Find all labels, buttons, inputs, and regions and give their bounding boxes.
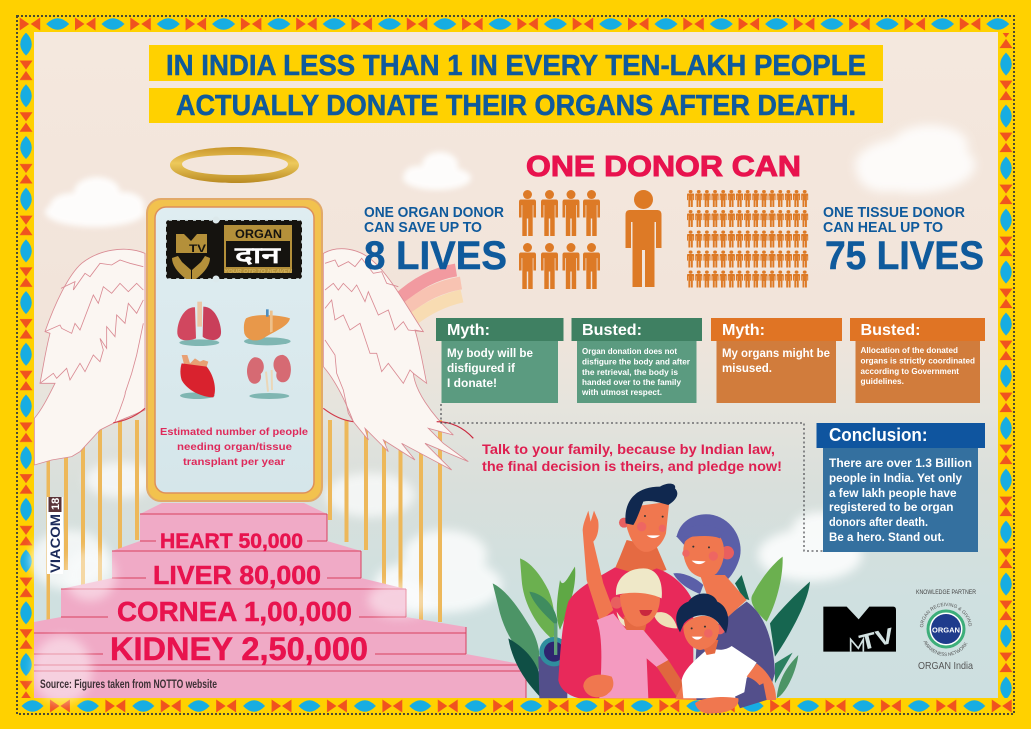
organ demand figures: HEART 50,000	[160, 530, 303, 553]
panel: conclusion: Conclusion:	[829, 425, 928, 445]
tissue donor statement: 75 LIVES	[825, 234, 984, 278]
organ demand figures: CORNEA 1,00,000	[117, 596, 352, 627]
tissue donor statement	[823, 204, 984, 278]
MTV logo: TV	[857, 623, 897, 655]
panel: conclusion: Be a hero. Stand out.	[829, 530, 944, 544]
ticket logo: YOUR OTP TO HEAVEN	[224, 269, 293, 275]
panel: myth one: My body will be	[447, 346, 533, 360]
left angel wing	[34, 249, 145, 465]
panel: busted one: disfigure the body and after	[582, 356, 691, 366]
icon: kidneys	[247, 355, 291, 399]
title banner: ACTUALLY DONATE THEIR ORGANS AFTER DEATH.	[176, 90, 856, 122]
panel: myth one	[436, 318, 564, 403]
organ donor statement: ONE ORGAN DONOR	[364, 204, 504, 221]
panel: conclusion: donors after death.	[829, 515, 928, 529]
panel: myth two: Myth:	[722, 322, 765, 339]
panel: conclusion: people in India. Yet only	[829, 471, 962, 485]
panel: busted two	[850, 318, 985, 403]
panel: busted one: handed over to the family	[582, 377, 681, 387]
panel: conclusion: a few lakh people have	[829, 486, 957, 500]
panel: busted two: guidelines.	[860, 376, 904, 386]
transplant caption: transplant per year	[183, 456, 285, 468]
panel: myth two: My organs might be	[722, 346, 830, 360]
panel: myth one: I donate!	[447, 376, 497, 390]
tissue donor statement: ONE TISSUE DONOR	[823, 204, 965, 221]
family illustration	[493, 484, 810, 714]
organ india logo: ORGAN India	[918, 660, 973, 672]
panel: busted two: Busted:	[860, 322, 920, 339]
phone card	[147, 199, 322, 501]
daughter	[583, 511, 683, 698]
tissue donor statement: CAN HEAL UP TO	[823, 219, 943, 236]
panel: myth two	[711, 318, 842, 403]
clouds	[30, 125, 975, 613]
panel: busted one: Busted:	[582, 322, 642, 339]
panel: conclusion	[816, 423, 985, 552]
organ donor statement: 8 LIVES	[364, 234, 507, 278]
seventy five person pictogram	[687, 190, 808, 288]
transplant caption: needing organ/tissue	[177, 441, 292, 453]
panel: myth one: disfigured if	[447, 361, 516, 375]
icon: liver	[244, 309, 291, 345]
title banner	[149, 45, 883, 123]
large donor figure	[626, 190, 662, 287]
organ donor statement: CAN SAVE UP TO	[364, 219, 482, 236]
son	[675, 594, 776, 714]
ticket logo: दान	[234, 242, 282, 268]
organ india logo: AWARENESS NETWORK	[924, 641, 968, 656]
icon: lungs	[177, 302, 221, 346]
MTV logo	[823, 607, 897, 655]
right angel wing	[323, 249, 473, 470]
viacom logo: VIACOM	[47, 514, 63, 573]
panel: myth two: misused.	[722, 361, 772, 375]
call to action: the final decision is theirs, and pledge now!	[482, 458, 782, 474]
call to action: Talk to your family, because by Indian law,	[482, 441, 775, 457]
panel: conclusion: There are over 1.3 Billion	[829, 456, 972, 470]
panel: conclusion: registered to be organ	[829, 500, 954, 514]
viacom logo: 18	[50, 498, 62, 510]
organ india logo: ORGAN RECEIVING & GIVING	[920, 602, 972, 628]
panel: busted two: Allocation of the donated	[860, 345, 958, 355]
staircase	[34, 503, 526, 698]
panel: myth one: Myth:	[447, 322, 490, 339]
panel: busted two: according to Government	[860, 366, 959, 376]
stair cloud overlays	[32, 549, 432, 704]
organ india logo: ORGAN	[932, 626, 960, 634]
organ india logo: KNOWLEDGE PARTNER	[916, 590, 977, 596]
organ demand figures	[110, 530, 368, 667]
rainbow	[398, 270, 462, 320]
source note: Source: Figures taken from NOTTO website	[40, 677, 217, 691]
panel: busted one: with utmost respect.	[581, 387, 662, 397]
title banner: IN INDIA LESS THAN 1 IN EVERY TEN-LAKH PEOPLE	[166, 50, 866, 82]
organ india logo	[916, 590, 977, 672]
call to action	[482, 441, 782, 474]
panel: busted one: Organ donation does not	[582, 346, 677, 356]
plant leaves	[493, 557, 810, 698]
panel: busted two: organs is strictly coordinated	[860, 356, 975, 366]
father	[558, 484, 693, 698]
panel: busted one	[572, 318, 702, 403]
eight person pictogram	[519, 190, 600, 289]
ticket logo	[166, 216, 302, 282]
organ demand figures: LIVER 80,000	[153, 560, 321, 590]
organ icons	[177, 302, 291, 399]
ticket logo: ORGAN	[235, 227, 282, 241]
panel: busted one: the retrieval, the body is	[582, 367, 678, 377]
mother	[673, 514, 775, 700]
transplant caption	[160, 426, 308, 468]
one donor can heading: ONE DONOR CAN	[526, 151, 801, 183]
organ demand figures: KIDNEY 2,50,000	[110, 631, 368, 667]
organ donor statement	[364, 204, 507, 278]
ticket logo: TV	[189, 243, 207, 255]
icon: heart	[180, 355, 215, 399]
golden railing bars	[46, 420, 442, 622]
transplant caption: Estimated number of people	[160, 426, 308, 438]
halo	[170, 147, 299, 183]
